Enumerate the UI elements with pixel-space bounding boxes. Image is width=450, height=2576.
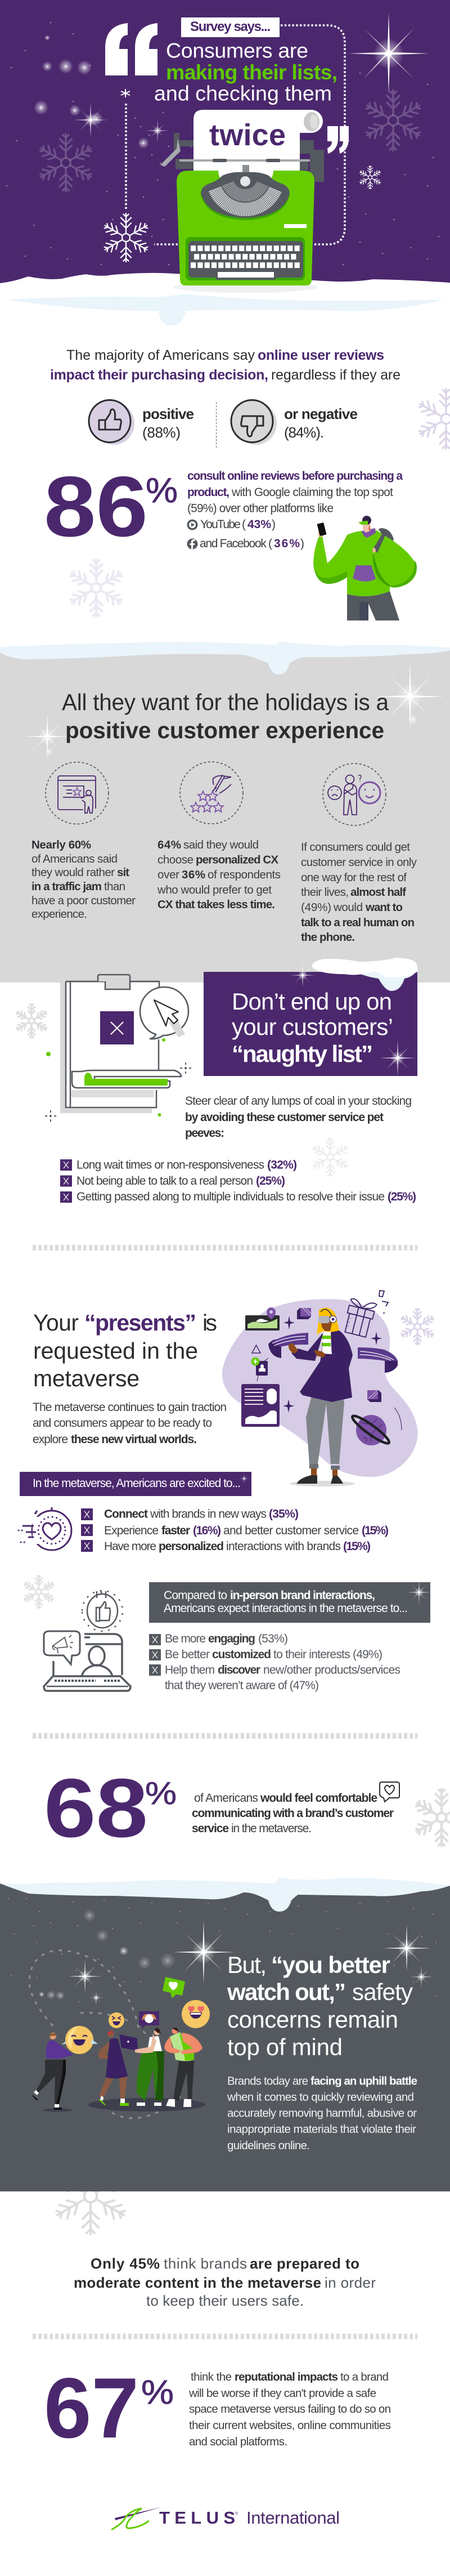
column 3 text: (49%) [301,901,331,914]
icon: thumbs down [231,400,277,445]
faint snowflake [52,2157,129,2235]
stat 67 description: reputational impacts [235,2370,338,2383]
stat 67 description: their current websites, online communities [189,2419,391,2432]
safety heading: top of mind [227,2034,343,2060]
faint snowflake [15,1003,48,1038]
person 1 [37,2060,65,2104]
banner: compared to in-person [149,1580,431,1623]
comparison list: to their interests (49%) [273,1648,382,1661]
sparkle group hero [34,13,429,149]
stat 86 description: with Google claiming the top spot [231,486,393,499]
person 2 [98,2041,127,2099]
stat 86 description: consult online reviews before purchasing a [187,470,403,483]
carriage [174,133,324,182]
stat 67 description [188,2370,391,2448]
excited list: interactions with brands [226,1540,341,1553]
stat 68 percent: 68 [44,1762,148,1855]
stat 67 percent: 67 [44,2360,139,2456]
column 2 text: personalized CX [196,854,278,866]
column 2 text: who would prefer to get [157,883,272,896]
panel: naughty list heading [204,958,417,1076]
moderation statement: moderate content in the metaverse [74,2274,321,2291]
paper [194,110,311,175]
landscape card [245,1315,280,1331]
metaverse heading: Your [33,1310,79,1336]
excited list: Connect [104,1508,148,1520]
ribbon right [385,1361,398,1373]
metaverse intro text: and consumers appear to be ready to [33,1417,212,1430]
snow cap [349,970,417,991]
column 2 text: 36% [182,868,205,881]
column 1 text: than [104,880,125,893]
icon: chat heart [380,1782,399,1802]
logo: ® [235,2511,238,2516]
hero title: making their lists, [166,60,338,84]
cubes [297,1308,311,1319]
pet peeves list: (25%) [256,1175,285,1187]
excited list: (15%) [362,1524,389,1537]
stat 68 description: service [192,1822,229,1835]
moderation statement: in order [325,2274,376,2291]
dotted frame [126,25,345,244]
safety heading: safety [352,1979,413,2005]
pet peeves intro: by avoiding these customer service pet [185,1111,384,1124]
excited list: with brands in new ways [150,1508,267,1520]
pet peeves list: Getting passed along to multiple individuals to resolve their issue [76,1190,385,1203]
stat 67 percent: % [141,2373,174,2411]
metaverse heading: is [202,1310,217,1336]
pet peeves list: (25%) [388,1190,416,1203]
pet peeves intro: Steer clear of any lumps of coal in your stocking [185,1095,412,1108]
faint snowflake [311,1137,349,1177]
quote mark open [105,23,158,75]
striped divider [33,1245,417,1251]
moderation statement: think brands [164,2255,247,2272]
column 1 text: experience. [32,908,87,921]
comparison list: that they weren’t aware of (47%) [165,1679,319,1692]
hero title [154,38,338,105]
stat 86 description: (59%) over other platforms like [187,502,334,515]
typewriter [160,110,324,293]
small star on frame [121,89,130,97]
banner: compared to in-person: in-person brand interactions, [230,1589,375,1602]
comparison list: Be more [165,1632,206,1645]
small white snowflake [359,166,381,189]
small outline items [252,1345,260,1353]
banner: americans are excited [20,1472,251,1496]
dashed heart [29,1950,181,2118]
illustration: man with phone [313,516,417,620]
excited list: (15%) [343,1540,371,1553]
type basket [201,177,290,220]
comparison list [149,1632,400,1692]
comparison list: Help them [165,1663,215,1677]
illustration: clipboard with cursor [45,975,191,1122]
banner: americans are excited: In the metaverse, Americans are excited to... [33,1477,241,1490]
comparison list: engaging [208,1632,255,1645]
faint snowflake left [37,133,94,193]
stat 68 percent: % [145,1775,177,1811]
heading: positive customer experience [65,717,384,743]
column 2 text: over [158,868,179,881]
gift [343,1297,377,1338]
metaverse intro text: The metaverse continues to gain traction [33,1401,227,1414]
emoji small [109,2012,124,2028]
logo [111,2507,340,2530]
comparison list: new/other products/services [263,1663,400,1677]
accents [46,1052,51,1056]
bubble dog [139,2011,159,2029]
moderation statement [74,2255,376,2309]
safety heading: But, [227,1952,267,1978]
survey label [181,17,280,37]
icon: browser and person [46,762,109,824]
heading: All they want for the holidays is a [62,689,389,715]
stat 67 description: will be worse if they can't provide a safe [188,2387,376,2400]
person 3 [137,2051,163,2100]
indicator [284,224,307,228]
stat 67 description: and social platforms. [189,2435,287,2448]
comparison list: Be better [165,1648,210,1661]
pet peeves intro: peeves: [185,1127,224,1140]
column 3 text: customer service in only [301,856,417,869]
stat 86 description: YouTube ( [200,518,246,531]
icon: thumbs up bulb and laptop [44,1591,130,1691]
stat 68 percent [44,1762,177,1855]
excited list: (35%) [269,1508,299,1520]
metaverse heading: metaverse [33,1365,140,1391]
column 1 text: sit [117,866,129,879]
picture card [241,1384,280,1427]
white snowflake [102,213,150,262]
banner: compared to in-person: Compared to [164,1589,227,1602]
striped divider [33,1733,417,1739]
intro text: online user reviews [258,347,384,363]
column 2 text: said they would [183,838,259,851]
planet [356,1415,386,1445]
stat 86 description: product, [187,486,230,499]
column 2 text: of respondents [208,868,281,881]
metaverse heading: requested in the [33,1338,198,1364]
logo: International [246,2508,340,2528]
snow dots [8,1899,436,2002]
striped divider [33,2333,417,2339]
excited list: and better customer service [223,1524,359,1537]
heading [62,689,389,743]
hero title: Consumers are [166,38,308,62]
excited list: faster [161,1524,190,1537]
paper bar [179,159,310,162]
illustration: woman in metaverse [222,1291,418,1486]
label positive: positive [142,405,194,422]
column 1 text: have a poor customer [32,894,136,907]
safety body: guidelines online. [227,2139,310,2152]
faint snowflake [416,388,450,450]
column 3 text: want to [365,901,403,914]
body [177,171,314,285]
column 3 text: If consumers could get [301,841,410,854]
sparkles [24,662,445,760]
excited list: Have more [104,1540,156,1553]
stat 86 description [187,470,403,550]
safety heading [227,1952,413,2060]
stat 67 description: space metaverse versus failing to do so on [189,2403,391,2416]
heading text: “naughty list” [232,1041,373,1067]
banner: compared to in-person: Americans expect interactions in the metaverse to... [164,1602,408,1615]
column 1 text: in a traffic jam [32,880,102,893]
faint snowflake right [363,90,424,151]
ice edge [0,1872,450,1912]
column 1 text: of Americans said [32,852,118,865]
survey label: Survey says... [190,19,271,34]
metaverse heading [33,1310,217,1391]
stat 68 description: communicating with a brand’s customer [192,1807,394,1820]
ice edge [0,636,450,675]
snow hero ground [0,273,450,349]
column 2 text [157,838,281,911]
pet peeves intro [185,1095,412,1140]
icon: facebook [187,538,198,550]
scroll [72,1070,181,1088]
typewriter soft shadow [174,282,318,293]
bubble green heart [163,1977,185,1998]
pet peeves list: Long wait times or non-responsiveness [76,1159,264,1171]
moderation statement: are prepared to [250,2255,359,2272]
moderation statement: Only 45% [91,2255,160,2272]
snow shadow band [6,294,444,325]
label positive [142,405,194,441]
icon: thumbs up [89,400,134,445]
comparison list: (53%) [258,1632,288,1645]
faint snowflake [413,1788,450,1847]
pet peeves list: Not being able to talk to a real person [76,1175,253,1187]
column 3 text: talk to a real human on [301,916,415,929]
column 1 text: they would rather [32,866,115,879]
heading text: your customers’ [232,1014,393,1040]
stat 86 description: and Facebook ( [200,537,272,550]
stat 67 description: think the [191,2370,232,2383]
stat 67 description: to a brand [340,2370,389,2383]
emoji heart eyes [182,2000,210,2028]
stat 68 description: in the metaverse. [231,1822,312,1835]
stat 86 description: ) [272,518,276,531]
icon: youtube [187,519,198,530]
snow dots [8,676,439,763]
woman figure [317,1307,339,1340]
moderation statement: to keep their users safe. [146,2292,304,2309]
snow dots in hero [7,23,439,282]
column 3 text [301,841,417,944]
comparison list: customized [212,1648,271,1661]
safety heading: concerns remain [227,2006,398,2033]
logo: TELUS [159,2508,235,2528]
illustration: group with emojis [32,1977,210,2111]
column 3 text: one way for the rest of [301,871,407,884]
comparison list: discover [218,1663,260,1677]
stat 68 description: of Americans [194,1792,258,1805]
safety body: Brands today are [227,2074,308,2088]
label negative: (84%). [284,424,324,441]
metaverse intro text: these new virtual worlds. [71,1433,197,1446]
label negative: or negative [284,405,358,422]
excited list: Experience [104,1524,159,1537]
column 1 text: Nearly 60% [32,838,91,851]
excited list: personalized [159,1540,224,1553]
column 3 text: almost half [350,886,406,899]
faint snowflake [22,1575,55,1609]
panel: hero background [0,0,450,290]
stat 86 description: ). [300,537,304,550]
heading text [232,988,393,1067]
word on paper: twice [209,118,286,152]
safety heading: watch out,” [227,1979,346,2005]
keyboard [186,237,305,280]
metaverse intro text [33,1401,227,1446]
safety body: facing an uphill battle [310,2074,417,2088]
stat 68 description: would feel comfortable [260,1792,377,1805]
faint snowflake [68,559,125,617]
heading text: Don’t end up on [232,988,392,1015]
intro text line 2: impact their purchasing decision, [50,367,268,383]
quote mark close [327,126,349,154]
label negative [284,405,358,441]
person 4 [173,2061,194,2100]
icon: thinking person with faces [323,764,386,825]
metaverse heading: “presents” [84,1310,196,1336]
snow edge [0,1869,450,1886]
divider vertical [216,402,217,448]
safety body: when it comes to quickly reviewing and [227,2091,414,2104]
sparkles and glows [39,1909,433,2006]
panel: safety dark background [0,1875,450,2191]
speech bubble with cursor [140,987,188,1039]
pet peeves list [60,1159,416,1203]
stat 86 percent: % [146,471,178,510]
icon: stars and hand [180,762,243,824]
faint snowflake [399,1308,435,1345]
metaverse intro text: explore [33,1433,68,1446]
pet peeves list: (32%) [267,1159,297,1171]
safety heading: “you better [271,1952,390,1978]
stat 86 percent: 86 [44,459,148,555]
stat 86 description: 43% [248,518,271,531]
safety body [227,2074,417,2152]
ribbon left [268,1340,281,1358]
panel: customer experience background [0,639,450,983]
safety body: inappropriate materials that violate their [227,2123,416,2136]
intro text line 2: regardless if they are [271,367,400,383]
column 3 text: their lives, [301,886,349,899]
column 2 text: CX that takes less time. [158,898,275,911]
column 2 text: choose [158,854,194,866]
stat 68 description [192,1792,394,1835]
top notch [218,169,273,180]
icon: heart ornament [19,1507,71,1550]
excited list [81,1508,389,1553]
label positive: (88%) [142,424,181,441]
stat 86 description: 36% [274,537,300,550]
column 2 text: 64% [158,838,181,851]
snow edge [0,633,450,648]
column 3 text: would [333,901,363,914]
intro text: The majority of Americans say [66,347,255,363]
hero title: and checking them [154,81,332,105]
column 1 text [32,838,136,921]
excited list: (16%) [193,1524,221,1537]
column 3 text: the phone. [301,931,355,944]
safety body: accurately removing harmful, abusive or [227,2107,417,2119]
